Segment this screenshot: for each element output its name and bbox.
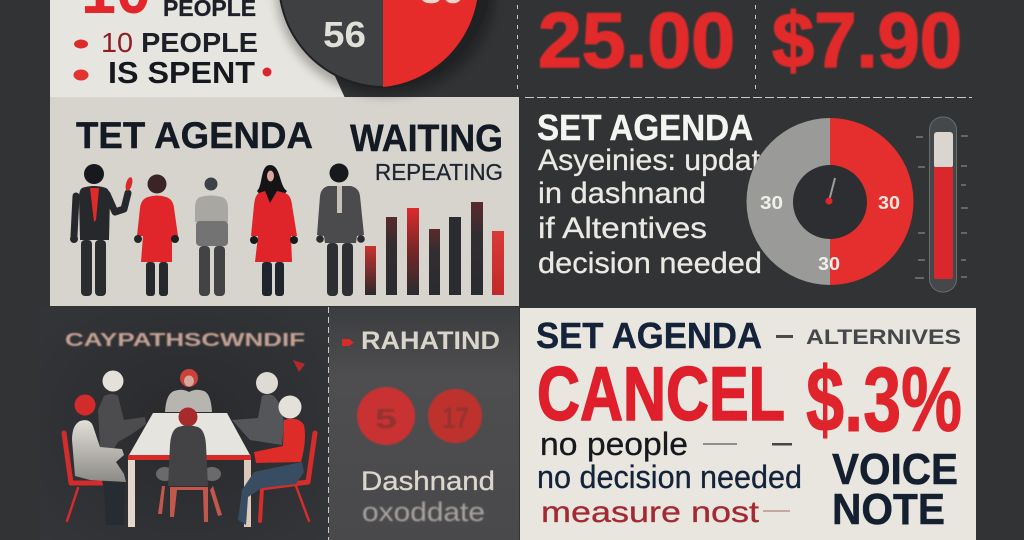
red arrow <box>342 339 354 346</box>
chair: right <box>260 433 315 521</box>
red circle right <box>428 389 482 443</box>
thermometer <box>915 117 968 292</box>
line no decision needed: no decision needed <box>537 459 802 495</box>
figure: woman with long hair <box>250 165 298 296</box>
heading set agenda: SET AGENDA <box>537 107 753 148</box>
panel: dashboard <box>328 307 519 540</box>
panel: top left people summary <box>50 0 345 98</box>
pie chart top <box>276 0 496 96</box>
table <box>128 413 251 527</box>
chair: centre <box>158 486 222 522</box>
voice note: NOTE <box>832 485 945 534</box>
label dashnand: Dashnand <box>361 466 495 496</box>
panel heading: RAHATIND <box>361 327 500 355</box>
person: back centre <box>165 369 212 412</box>
person: back right <box>232 372 284 445</box>
line no people: no people <box>540 426 688 462</box>
figure: grey person from behind <box>195 178 228 296</box>
heading waiting: WAITING <box>350 118 503 160</box>
red circle left <box>357 387 415 445</box>
big figure: $.3% <box>806 349 962 451</box>
body text <box>538 144 762 280</box>
label oxoddate: oxoddate <box>362 497 485 527</box>
body text: Asyeinies: updat <box>538 144 761 177</box>
voice note: VOICE <box>832 445 958 494</box>
chair: left <box>64 433 116 522</box>
body text: decision needed <box>538 247 762 280</box>
panel: people waiting <box>50 97 519 306</box>
panel: set agenda dark <box>537 107 968 292</box>
label repeating: REPEATING <box>375 159 503 185</box>
bar chart <box>365 202 504 295</box>
gauge: 30 <box>878 193 900 213</box>
body text: in dashnand <box>538 177 706 210</box>
red circle left: 5 <box>375 403 397 434</box>
bullet one <box>74 40 88 48</box>
small dashes <box>703 443 792 446</box>
scene heading: CAYPATHSCWNDIF <box>65 330 305 350</box>
bullet two <box>74 70 88 80</box>
person: front centre <box>156 408 221 486</box>
person: back left <box>98 370 146 452</box>
small dash <box>763 510 790 512</box>
line is spent: IS SPENT <box>108 55 255 90</box>
line measure nost: measure nost <box>541 496 760 529</box>
big word cancel: CANCEL <box>537 352 785 437</box>
big numbers top right <box>538 0 962 84</box>
line 10 people: 10 PEOPLE <box>101 27 258 58</box>
voice note <box>832 445 958 534</box>
person: front right <box>238 396 305 525</box>
person: front left <box>72 394 126 525</box>
panel: meeting scene <box>40 307 328 540</box>
figure: woman in red coat <box>134 174 179 296</box>
gauge: 30 <box>760 193 783 213</box>
bullet three <box>262 68 272 76</box>
label alternives: ALTERNIVES <box>806 326 961 349</box>
dash <box>776 335 793 338</box>
body text: if Altentives <box>538 212 707 245</box>
gauge: 30 <box>818 254 840 274</box>
figure: man raising hand <box>70 164 134 296</box>
heading set agenda: SET AGENDA <box>536 315 762 356</box>
label 56: 56 <box>323 14 366 55</box>
red circle right: 17 <box>442 402 469 435</box>
panel: cancel <box>520 308 976 540</box>
figure: man in grey jacket <box>316 164 365 296</box>
gauge <box>746 118 914 285</box>
heading tet agenda: TET AGENDA <box>76 115 313 156</box>
small red mark <box>293 360 305 372</box>
